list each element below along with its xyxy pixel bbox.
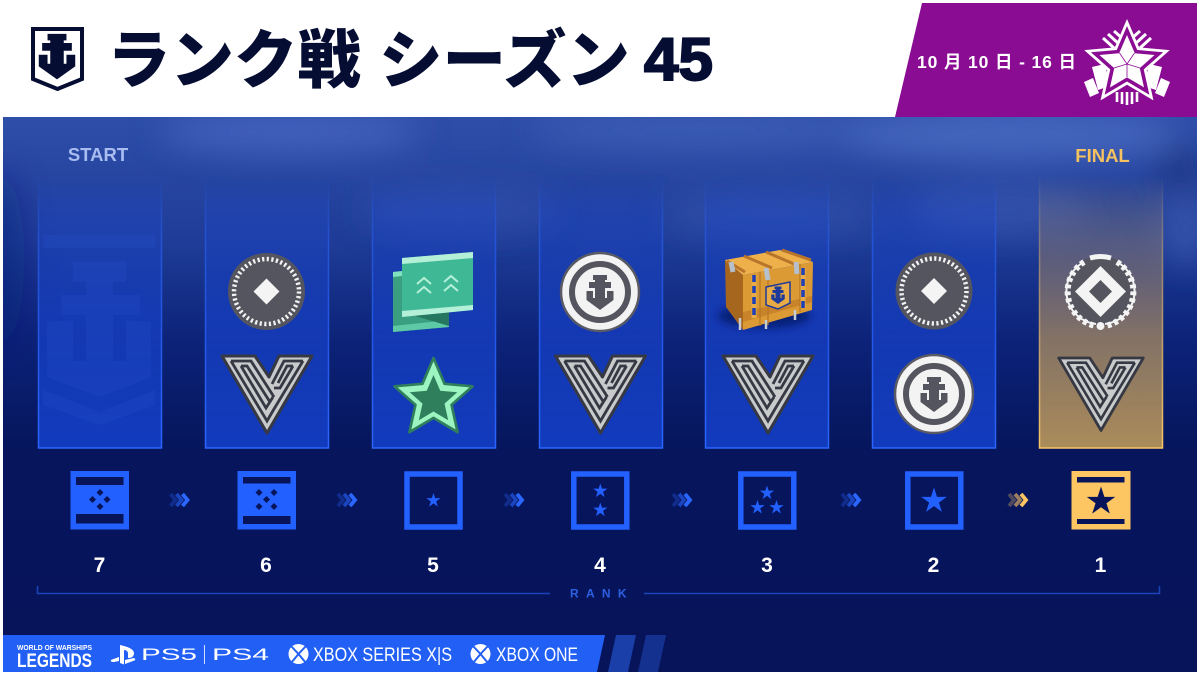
icon: season star (1080, 15, 1174, 105)
rank axis (38, 586, 1160, 600)
icon: rope medal (228, 253, 305, 330)
icon: anchor emblem (561, 253, 639, 331)
logo shield (33, 29, 82, 89)
start label: START (68, 144, 129, 165)
rank 7 icon (70, 471, 129, 530)
rank numbers: 5 (427, 554, 439, 577)
icon: V chevron insignia (556, 356, 646, 433)
title: シーズン (379, 10, 630, 102)
rank numbers: 6 (260, 554, 272, 577)
logo: World of Warships Legends (17, 645, 92, 672)
icon: Xbox (288, 644, 308, 664)
label: Xbox Series X|S: XBOX SERIES X|S (313, 644, 452, 666)
icon: V chevron insignia (1059, 358, 1143, 430)
final label: FINAL (1075, 145, 1130, 166)
rank numbers: 7 (94, 554, 105, 577)
date text: 10 月 10 日 - 16 日 (917, 52, 1076, 72)
icon: anchor emblem (895, 355, 973, 433)
rank numbers: 1 (1095, 554, 1107, 577)
icon: rope medal (896, 252, 972, 330)
icon: wooden crate (718, 250, 813, 330)
rank axis label: RANK (570, 586, 634, 600)
footer platform bar (3, 635, 666, 672)
arrow: rank 7 to 6 (170, 494, 188, 506)
label: Xbox One: XBOX ONE (496, 644, 578, 666)
panel: rank 3 rewards (706, 175, 828, 448)
panel: rank 2 rewards (872, 175, 996, 448)
arrow: rank 5 to 4 (505, 494, 522, 506)
arrow: rank 4 to 3 (673, 494, 690, 506)
season date badge (895, 3, 1197, 117)
title: ランク戦 (107, 10, 361, 102)
icon: V chevron insignia (222, 356, 312, 433)
rank numbers: 3 (761, 554, 773, 577)
icon: laurel medal (1066, 256, 1136, 330)
icon: green star (395, 358, 472, 432)
rank 4 icon (574, 474, 627, 527)
label: PS4: PS4 (212, 645, 269, 664)
rank 6 icon (238, 471, 296, 530)
panel: rank 5 rewards (372, 175, 496, 448)
logo: World of Warships Legends: LEGENDS (17, 651, 92, 672)
arrow: rank 3 to 2 (842, 494, 859, 506)
rank 5 icon (407, 474, 460, 527)
title (107, 10, 713, 102)
arrow: rank 2 to 1 (1009, 494, 1026, 506)
icon: PlayStation (111, 645, 135, 664)
panel: rank 1 final rewards (1040, 175, 1162, 448)
panel: rank 4 rewards (540, 175, 662, 448)
rank numbers: 2 (928, 554, 939, 577)
icon: faded shield watermark (43, 235, 155, 425)
panel: rank 6 rewards (206, 175, 328, 448)
icon: green flag (393, 252, 473, 332)
arrow: rank 6 to 5 (338, 494, 355, 506)
rank 1 icon (1072, 471, 1130, 530)
rank 2 icon (908, 474, 961, 527)
label: PS5: PS5 (141, 645, 197, 664)
rank 3 icon (741, 474, 794, 527)
icon: V chevron insignia (723, 356, 813, 433)
separator line (204, 645, 206, 664)
panel: rank 7 start (38, 175, 162, 448)
rank numbers (94, 554, 1107, 577)
icon: Xbox (470, 644, 490, 664)
logo: World of Warships Legends: WORLD OF WARSHIPS (17, 645, 92, 652)
title: 45 (644, 26, 713, 93)
rank numbers: 4 (594, 554, 606, 577)
